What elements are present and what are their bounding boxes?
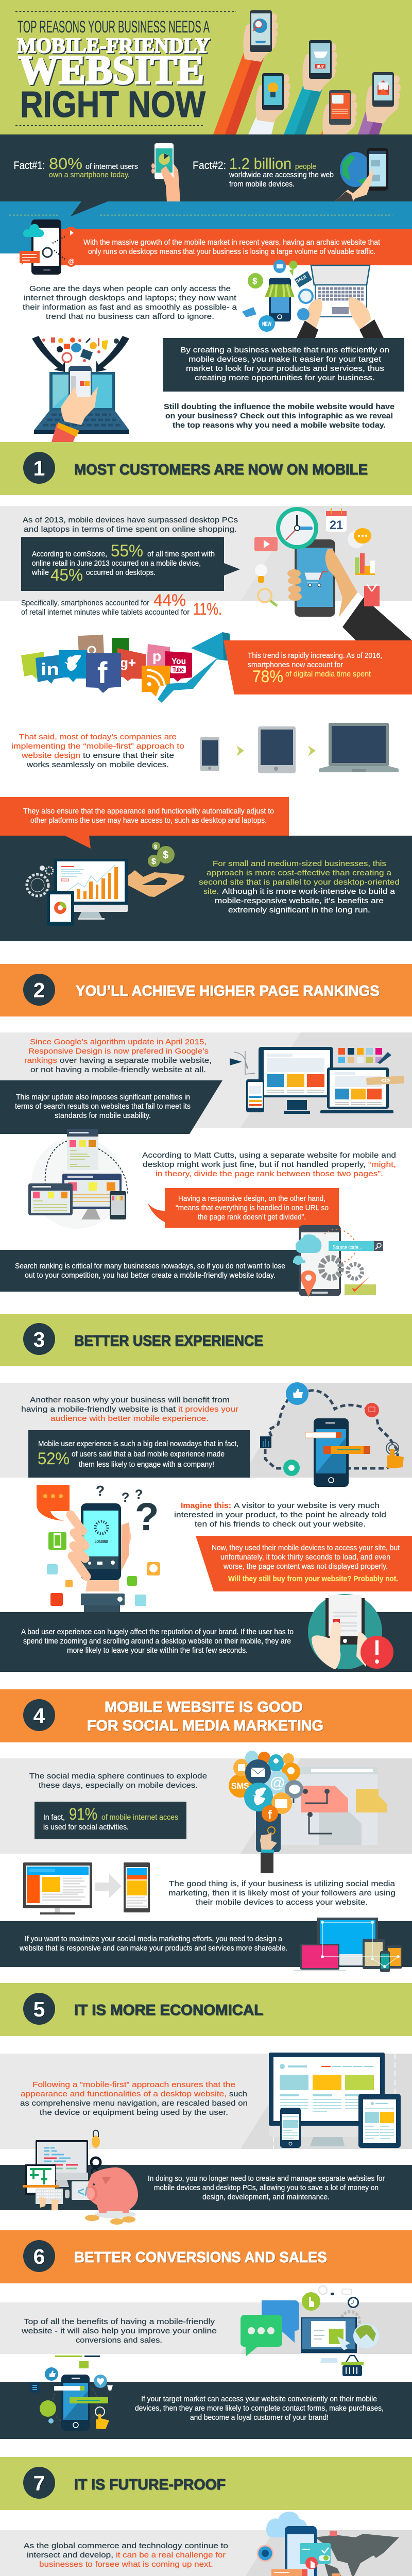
callout: save money: In doing so, you no longer need to create and manage separate websites for [148, 2174, 385, 2183]
callout: comScore stat: of all time spent with [147, 550, 215, 558]
text: smartphones and tablets stat [21, 591, 222, 618]
text: matt cutts: desktop might work just fine, but if not handled properly, [143, 1160, 366, 1169]
title: RIGHT NOW [20, 84, 205, 125]
illustration: social media icons with rising arrow: p [152, 648, 161, 664]
callout: appearance and functionality: They also ensure that the appearance and functionality automatically adjust to [23, 807, 274, 816]
callout: loyal customer: and become a loyal customer of your brand! [190, 2413, 329, 2422]
text: as of 2013 [23, 516, 238, 534]
callout: comScore stat: while [31, 568, 49, 577]
illustration: loading phone with question marks: LOADING [95, 1539, 108, 1544]
callout: 78 percent: 78% [252, 667, 283, 686]
illustration: phone with app icons [30, 2355, 113, 2431]
panel: reason 6 conversions [0, 2286, 412, 2376]
fact 2: people [295, 162, 316, 171]
panel: reason 1 shopping [0, 506, 412, 601]
callout: bad user experience: A bad user experience can hugely affect the reputation of your brand. If the user has to [21, 1628, 294, 1636]
heading: reason 4: MOBILE WEBSITE IS GOOD [105, 1699, 303, 1716]
fact 1 [13, 155, 138, 179]
illustration: phone, tablet and laptop [200, 723, 399, 773]
heading: reason 4: FOR SOCIAL MEDIA MARKETING [87, 1718, 323, 1734]
text: another reason: audience with better mobile experience. [50, 1414, 209, 1423]
callout: bad user experience: more likely to leave your site within the first few seconds. [67, 1646, 248, 1655]
callout: appearance and functionality: other platforms the user may have access to, such as desktop and laptops. [30, 816, 267, 825]
text: global commerce: As the global commerce and technology continue to [24, 2541, 228, 2550]
fact 1: Fact#1: [13, 160, 45, 172]
illustration: social media icons with rising arrow: Tube [173, 666, 184, 673]
text: gone are the days: trend that no business can afford to ignore. [46, 312, 214, 321]
icon: phone warning [308, 1594, 393, 1669]
callout: comScore stat: occurred on desktops. [86, 568, 156, 577]
illustration: analytics monitor, coins and hand: $ [163, 850, 168, 861]
text: top of all the benefits: website - it will also help you improve your online [21, 2327, 217, 2335]
heading: reason 6: BETTER CONVERSIONS AND SALES [74, 2249, 327, 2266]
title: TOP REASONS YOUR BUSINESS NEEDS A [18, 18, 210, 36]
text: matt cutts [142, 1151, 396, 1178]
illustration: loading phone with question marks: ? [135, 1495, 159, 1539]
illustration: phone with source code search [293, 1225, 383, 1297]
text: following mobile-first: Following a “mobile-first” approach ensures that the [32, 2080, 235, 2089]
illustration: social bubbles from phone: SMS [231, 1781, 249, 1791]
callout: penalties: This major update also imposes significant penalties in [16, 1093, 190, 1101]
illustration: coding setup and piggy bank: $ [112, 2171, 116, 2179]
text: matt cutts: “might, [368, 1160, 396, 1169]
illustration: desktop to mobile layout [23, 1862, 150, 1914]
illustration: hand shopping on phone with icons: 21 [330, 518, 343, 532]
callout: 78 percent [224, 640, 412, 694]
illustration: hand shopping on phone with icons [254, 507, 412, 640]
text: the good thing: marketing, then it is likely most of your followers are using [168, 1889, 396, 1897]
text: following mobile-first: such [229, 2090, 247, 2098]
illustration: social bubbles from phone: f [268, 1808, 272, 1821]
heading: reason 4 [0, 1689, 412, 1742]
illustration: social bubbles from phone [229, 1751, 387, 1873]
illustration: loading phone with question marks: ? [96, 1483, 105, 1499]
callout: responsive design quote: “means that everything is handled in one URL so [176, 1204, 329, 1212]
callout: responsive design quote: Having a responsive design, on the other hand, [178, 1194, 325, 1203]
text: another reason: it provides your [178, 1405, 238, 1414]
illustration: social bubbles from phone: @ [270, 1774, 285, 1791]
callout: by creating a business website: By creating a business website that runs efficiently on [180, 346, 389, 354]
panel: reason 7 future-proof [0, 2512, 412, 2576]
text: gone are the days: Gone are the days when people can only access the [29, 284, 231, 293]
heading: reason 2: YOU’LL ACHIEVE HIGHER PAGE RANKINGS [76, 983, 380, 999]
illustration: analytics monitor, coins and hand [27, 842, 185, 926]
callout: loyal customer [0, 2382, 412, 2439]
text: still doubting: Still doubting the influence the mobile website would have [164, 402, 394, 411]
heading: reason 3: 3 [33, 1328, 45, 1351]
callout: thirty seconds: Will they still buy from your website? Probably not. [228, 1574, 398, 1583]
text: another reason: having a mobile-friendly website is that [21, 1405, 176, 1414]
fact 2: worldwide are accessing the web [229, 171, 334, 179]
icon: phone with cloud and message [20, 219, 77, 275]
fact 1: own a smartphone today. [49, 171, 130, 179]
text: another reason: Another reason why your business will benefit from [30, 1396, 230, 1404]
callout: bad user experience: spend time zooming and scrolling around a desktop website on their mobile, they are [23, 1637, 291, 1646]
callout: by creating a business website: creating more opportunities for your business. [195, 374, 375, 382]
title [17, 18, 210, 125]
fact 2: from mobile devices. [229, 180, 295, 189]
callout: 52 percent: of users said that a bad mobile experience made [72, 1450, 225, 1459]
text: google update [24, 1038, 212, 1074]
text: mobile-first companies [11, 733, 184, 769]
text: global commerce: intersect and develop, [27, 2551, 113, 2560]
illustration: loading phone with question marks: ? [122, 1490, 129, 1505]
icon: hand holding white phone [151, 143, 180, 201]
text: small and medium businesses [199, 859, 400, 914]
callout: maximize social media [0, 1921, 412, 1967]
callout: 78 percent: This trend is rapidly increasing. As of 2016, [248, 651, 382, 660]
text: social media sphere: these days, especially on mobile devices. [39, 1781, 198, 1790]
illustration: mobile store and laptop: SALE [296, 274, 307, 284]
icon: phone with cloud and message: @ [68, 258, 75, 265]
panel: reason 3 user experience [0, 1383, 412, 1478]
text: gone are the days [23, 284, 237, 321]
callout: thirty seconds: Now, they used their mobile devices to access your site, but [212, 1544, 400, 1552]
fact 2: 1.2 billion [229, 155, 291, 173]
callout: loyal customer: If your target market can access your website conveniently on their mobile [141, 2395, 377, 2403]
text: another reason [21, 1396, 238, 1423]
text: still doubting: the top reasons why you need a mobile website today. [173, 421, 386, 430]
text: small and medium businesses: mobile-responsive website, it’s benefits are [215, 896, 384, 905]
heading: reason 6: 6 [33, 2245, 45, 2268]
text: following mobile-first: as comprehensive menu navigation, are rescaled based on [20, 2099, 248, 2108]
heading: reason 1: MOST CUSTOMERS ARE NOW ON MOBILE [74, 462, 368, 478]
heading: reason 7: 7 [33, 2471, 45, 2495]
panel: reason 2 responsive design [0, 1032, 412, 1128]
callout: by creating a business website [163, 338, 404, 392]
illustration: coding setup and piggy bank: </ [77, 2185, 88, 2199]
callout: search ranking: Search ranking is critical for many businesses nowadays, so if you do not want to lose [15, 1262, 285, 1270]
text: following mobile-first [20, 2080, 248, 2117]
text: following mobile-first: appearance and functionalities of a desktop website, [21, 2090, 227, 2098]
text: gone are the days: their information as fast and as smoothly as possible- a [23, 303, 237, 312]
illustration: funnel into laptop and phone [32, 336, 129, 442]
illustration: social media icons with rising arrow: f [97, 656, 108, 690]
text: google update: or not having a mobile-friendly website at all. [30, 1065, 206, 1074]
callout: 78 percent: smartphones now account for [248, 660, 343, 669]
heading: reason 5: 5 [33, 1997, 45, 2021]
illustration: social media icons with rising arrow: You [171, 656, 186, 666]
callout: bad user experience [0, 1612, 412, 1672]
callout: 91 percent: 91% [69, 1805, 97, 1823]
text: the good thing: The good thing is, if your business is utilizing social media [169, 1879, 396, 1888]
callout: thirty seconds: unfortunately, it took thirty seconds to load, and even [220, 1553, 390, 1562]
fact 2: Fact#2: [193, 160, 226, 172]
illustration: responsive device family [294, 1918, 402, 1972]
title: MOBILE-FRIENDLY [17, 33, 210, 57]
callout: 78 percent: of digital media time spent [285, 670, 371, 679]
text: mobile-first companies: works seamlessly on mobile devices. [26, 760, 169, 769]
illustration: loading phone with question marks: ? [135, 1487, 143, 1502]
callout: comScore stat [21, 537, 240, 591]
callout: 52 percent: Mobile user experience is such a big deal nowadays that in fact, [38, 1439, 238, 1448]
callout: by creating a business website: market to look for your products and services, thus [186, 364, 384, 373]
illustration: responsive devices with design tools: </> [381, 1077, 390, 1084]
panel: reason 4 social media [0, 1751, 412, 1873]
text: as of 2013: and laptops in terms of time spent on online shopping. [24, 525, 237, 534]
heading: reason 5: IT IS MORE ECONOMICAL [74, 2002, 263, 2019]
callout: 91 percent: is used for social activities. [43, 1823, 129, 1832]
icon: hand with shopping phone: BUY [317, 64, 324, 69]
illustration: loading phone with question marks [37, 1483, 160, 1612]
callout: penalties: terms of search results on websites that fail to meet its [15, 1102, 191, 1111]
text: still doubting [164, 402, 394, 430]
callout: thirty seconds [196, 1536, 412, 1591]
callout: appearance and functionality [0, 797, 289, 849]
text: the good thing: their mobile devices to access your website. [196, 1898, 368, 1907]
panel: hero [0, 0, 412, 142]
icon: globe with phone [335, 148, 388, 201]
text: small and medium businesses: For small and medium-sized businesses, this [213, 859, 386, 868]
illustration: coding setup and piggy bank [23, 2130, 138, 2225]
heading: reason 6 [0, 2230, 412, 2283]
heading: reason 7: IT IS FUTURE-PROOF [74, 2477, 226, 2493]
illustration: mobile store and laptop [242, 260, 384, 338]
text: global commerce [24, 2541, 228, 2569]
callout: loyal customer: devices, then they are more likely to complete contact forms, make purchases, [135, 2404, 384, 2413]
callout: 52 percent: them less likely to engage with a company! [79, 1460, 214, 1469]
heading: reason 2: 2 [33, 978, 45, 1002]
heading: reason 1 [0, 442, 412, 495]
panel: facts [0, 134, 412, 201]
text: intro band: With the massive growth of the mobile market in recent years, having an archaic website that [83, 238, 381, 247]
callout: comScore stat: online retail in June 2013 occurred on a mobile device, [32, 559, 201, 568]
callout: 91 percent [35, 1802, 186, 1839]
text: small and medium businesses: second site that is parallel to your desktop-oriented [199, 878, 400, 887]
callout: comScore stat: 45% [50, 566, 83, 584]
callout: comScore stat: 55% [111, 541, 143, 560]
text: google update: Since Google’s algorithm update in April 2015, [30, 1038, 207, 1046]
callout: comScore stat: According to comScore, [32, 550, 107, 558]
text: imagine this: Imagine this: [181, 1501, 231, 1510]
text: the good thing [168, 1879, 396, 1907]
icon: hand with shopping phone [284, 40, 337, 134]
callout: 52 percent [28, 1430, 250, 1478]
callout: search ranking: out to your competition, you had better create a mobile-friendly website today. [25, 1271, 276, 1280]
callout: 52 percent: 52% [38, 1449, 70, 1468]
illustration: mobile store and laptop: $ [252, 276, 258, 286]
text: imagine this: A visitor to your website is very much [234, 1501, 380, 1510]
fact 1: of internet users [85, 162, 138, 171]
text: smartphones and tablets stat: 44% [153, 591, 186, 609]
heading: reason 1: 1 [33, 456, 45, 480]
heading: reason 2 [0, 964, 412, 1016]
text: as of 2013: As of 2013, mobile devices have surpassed desktop PCs [23, 516, 238, 524]
text: small and medium businesses: Although it is more work-intensive to build a [222, 887, 396, 896]
text: mobile-first companies: implementing the “mobile-first” approach to [11, 742, 184, 751]
text: small and medium businesses: extremely significant in the long run. [228, 906, 370, 914]
callout: by creating a business website: mobile devices, you make it easier for your target [188, 355, 382, 364]
callout: maximize social media: website that is responsive and can make your products and services more shareable. [19, 1944, 287, 1953]
callout: search ranking [0, 1250, 299, 1292]
panel: intro band [0, 201, 412, 275]
text: imagine this [174, 1501, 386, 1529]
text: matt cutts: According to Matt Cutts, using a separate website for mobile and [142, 1151, 396, 1160]
title: WEBSITE [19, 48, 204, 93]
illustration: social media icons with rising arrow: g+ [120, 655, 136, 670]
text: top of all the benefits: conversions and sales. [76, 2336, 162, 2345]
text: still doubting: on your business? Check out this infographic as we reveal [165, 412, 393, 420]
text: imagine this: ten of his friends to check out your website. [195, 1520, 366, 1529]
text: following mobile-first: the device or equipment being used by the user. [40, 2108, 228, 2117]
illustration: social media icons with rising arrow: in [41, 660, 59, 679]
callout: 91 percent: of mobile internet acces [101, 1813, 178, 1822]
heading: reason 4: 4 [33, 1704, 45, 1727]
text: small and medium businesses: site. [203, 887, 219, 896]
text: social media sphere: The social media sphere continues to explode [29, 1772, 207, 1781]
text: social media sphere [29, 1772, 207, 1790]
callout: save money: mobile devices and desktop PCs, allowing you to save a lot of money on [154, 2183, 379, 2192]
icon: hand with light bulb phone [248, 73, 290, 134]
callout: save money: design, development, and maintenance. [202, 2193, 330, 2201]
text: smartphones and tablets stat: 11%. [193, 600, 222, 618]
callout: penalties [0, 1080, 222, 1134]
illustration: phone, cloud and world map [258, 2512, 399, 2576]
text: top of all the benefits: Top of all the benefits of having a mobile-friendly [24, 2317, 215, 2326]
text: intro band: only runs on desktops means that your business is losing a large volume of valuable traffic. [88, 247, 375, 256]
text: top of all the benefits [21, 2317, 217, 2345]
callout: 91 percent: In fact, [43, 1813, 65, 1822]
text: smartphones and tablets stat: Specifically, smartphones accounted for [21, 599, 149, 607]
heading: reason 5 [0, 1983, 412, 2036]
illustration: responsive devices with design tools [230, 1047, 404, 1114]
illustration: social media icons with rising arrow [21, 632, 231, 703]
icon: hand with chat phone [320, 90, 357, 142]
fact 1: 80% [49, 155, 82, 173]
icon: hand with search phone [213, 10, 278, 134]
callout: responsive design quote: the page rank doesn’t get divided”. [198, 1213, 306, 1222]
heading: reason 3: BETTER USER EXPERIENCE [74, 1333, 263, 1349]
illustration: chat bubbles, laptop and globe [241, 2286, 379, 2376]
callout: save money [0, 2165, 412, 2210]
illustration: analytics monitor, coins and hand: $ [154, 844, 157, 850]
text: matt cutts: in theory, divide the page rank between those two pages”. [156, 1170, 383, 1178]
callout: penalties: standards for mobile usability. [55, 1111, 151, 1120]
text: google update: Responsive Design is now prefered in Google’s [28, 1047, 209, 1056]
text: mobile-first companies: That said, most of today’s companies are [19, 733, 177, 741]
illustration: rescaled layouts on three devices [269, 2053, 401, 2149]
illustration: connected website layouts [28, 1129, 127, 1229]
panel: reason 5 economical [0, 2053, 412, 2149]
text: gone are the days: internet through desktops and laptops; they now want [24, 294, 237, 302]
text: global commerce: it can be a real challenge for [116, 2551, 226, 2560]
text: global commerce: businesses to forsee what is coming up next. [39, 2560, 213, 2569]
text: google update: over having a separate mobile website, [60, 1056, 212, 1065]
text: mobile-first companies: to ensure that their site [83, 751, 174, 760]
text: intro band [83, 238, 381, 256]
text: imagine this: interested in your product, to the point he already told [174, 1511, 386, 1519]
text: mobile-first companies: website design [21, 751, 80, 760]
callout: maximize social media: If you want to maximize your social media marketing efforts, you need to design a [25, 1935, 283, 1943]
illustration: phone with source code search: Source code... [333, 1244, 362, 1251]
heading: reason 7 [0, 2457, 412, 2510]
callout: thirty seconds: worse, the page content was not displayed properly. [223, 1562, 388, 1571]
icon: hand with email phone [358, 72, 401, 134]
illustration: phone on cloud network [260, 1382, 404, 1487]
illustration: mobile store and laptop: NEW [262, 320, 271, 328]
text: small and medium businesses: approach is more cost-effective than creating a [207, 869, 392, 877]
text: google update: rankings [24, 1056, 57, 1065]
text: smartphones and tablets stat: of retail internet minutes while tablets accounted for [21, 608, 190, 617]
panel: cost-effective [0, 836, 412, 941]
heading: reason 3 [0, 1314, 412, 1366]
callout: responsive design quote [148, 1188, 339, 1228]
illustration: analytics monitor, coins and hand: $ [151, 857, 156, 866]
fact 2 [193, 155, 334, 189]
